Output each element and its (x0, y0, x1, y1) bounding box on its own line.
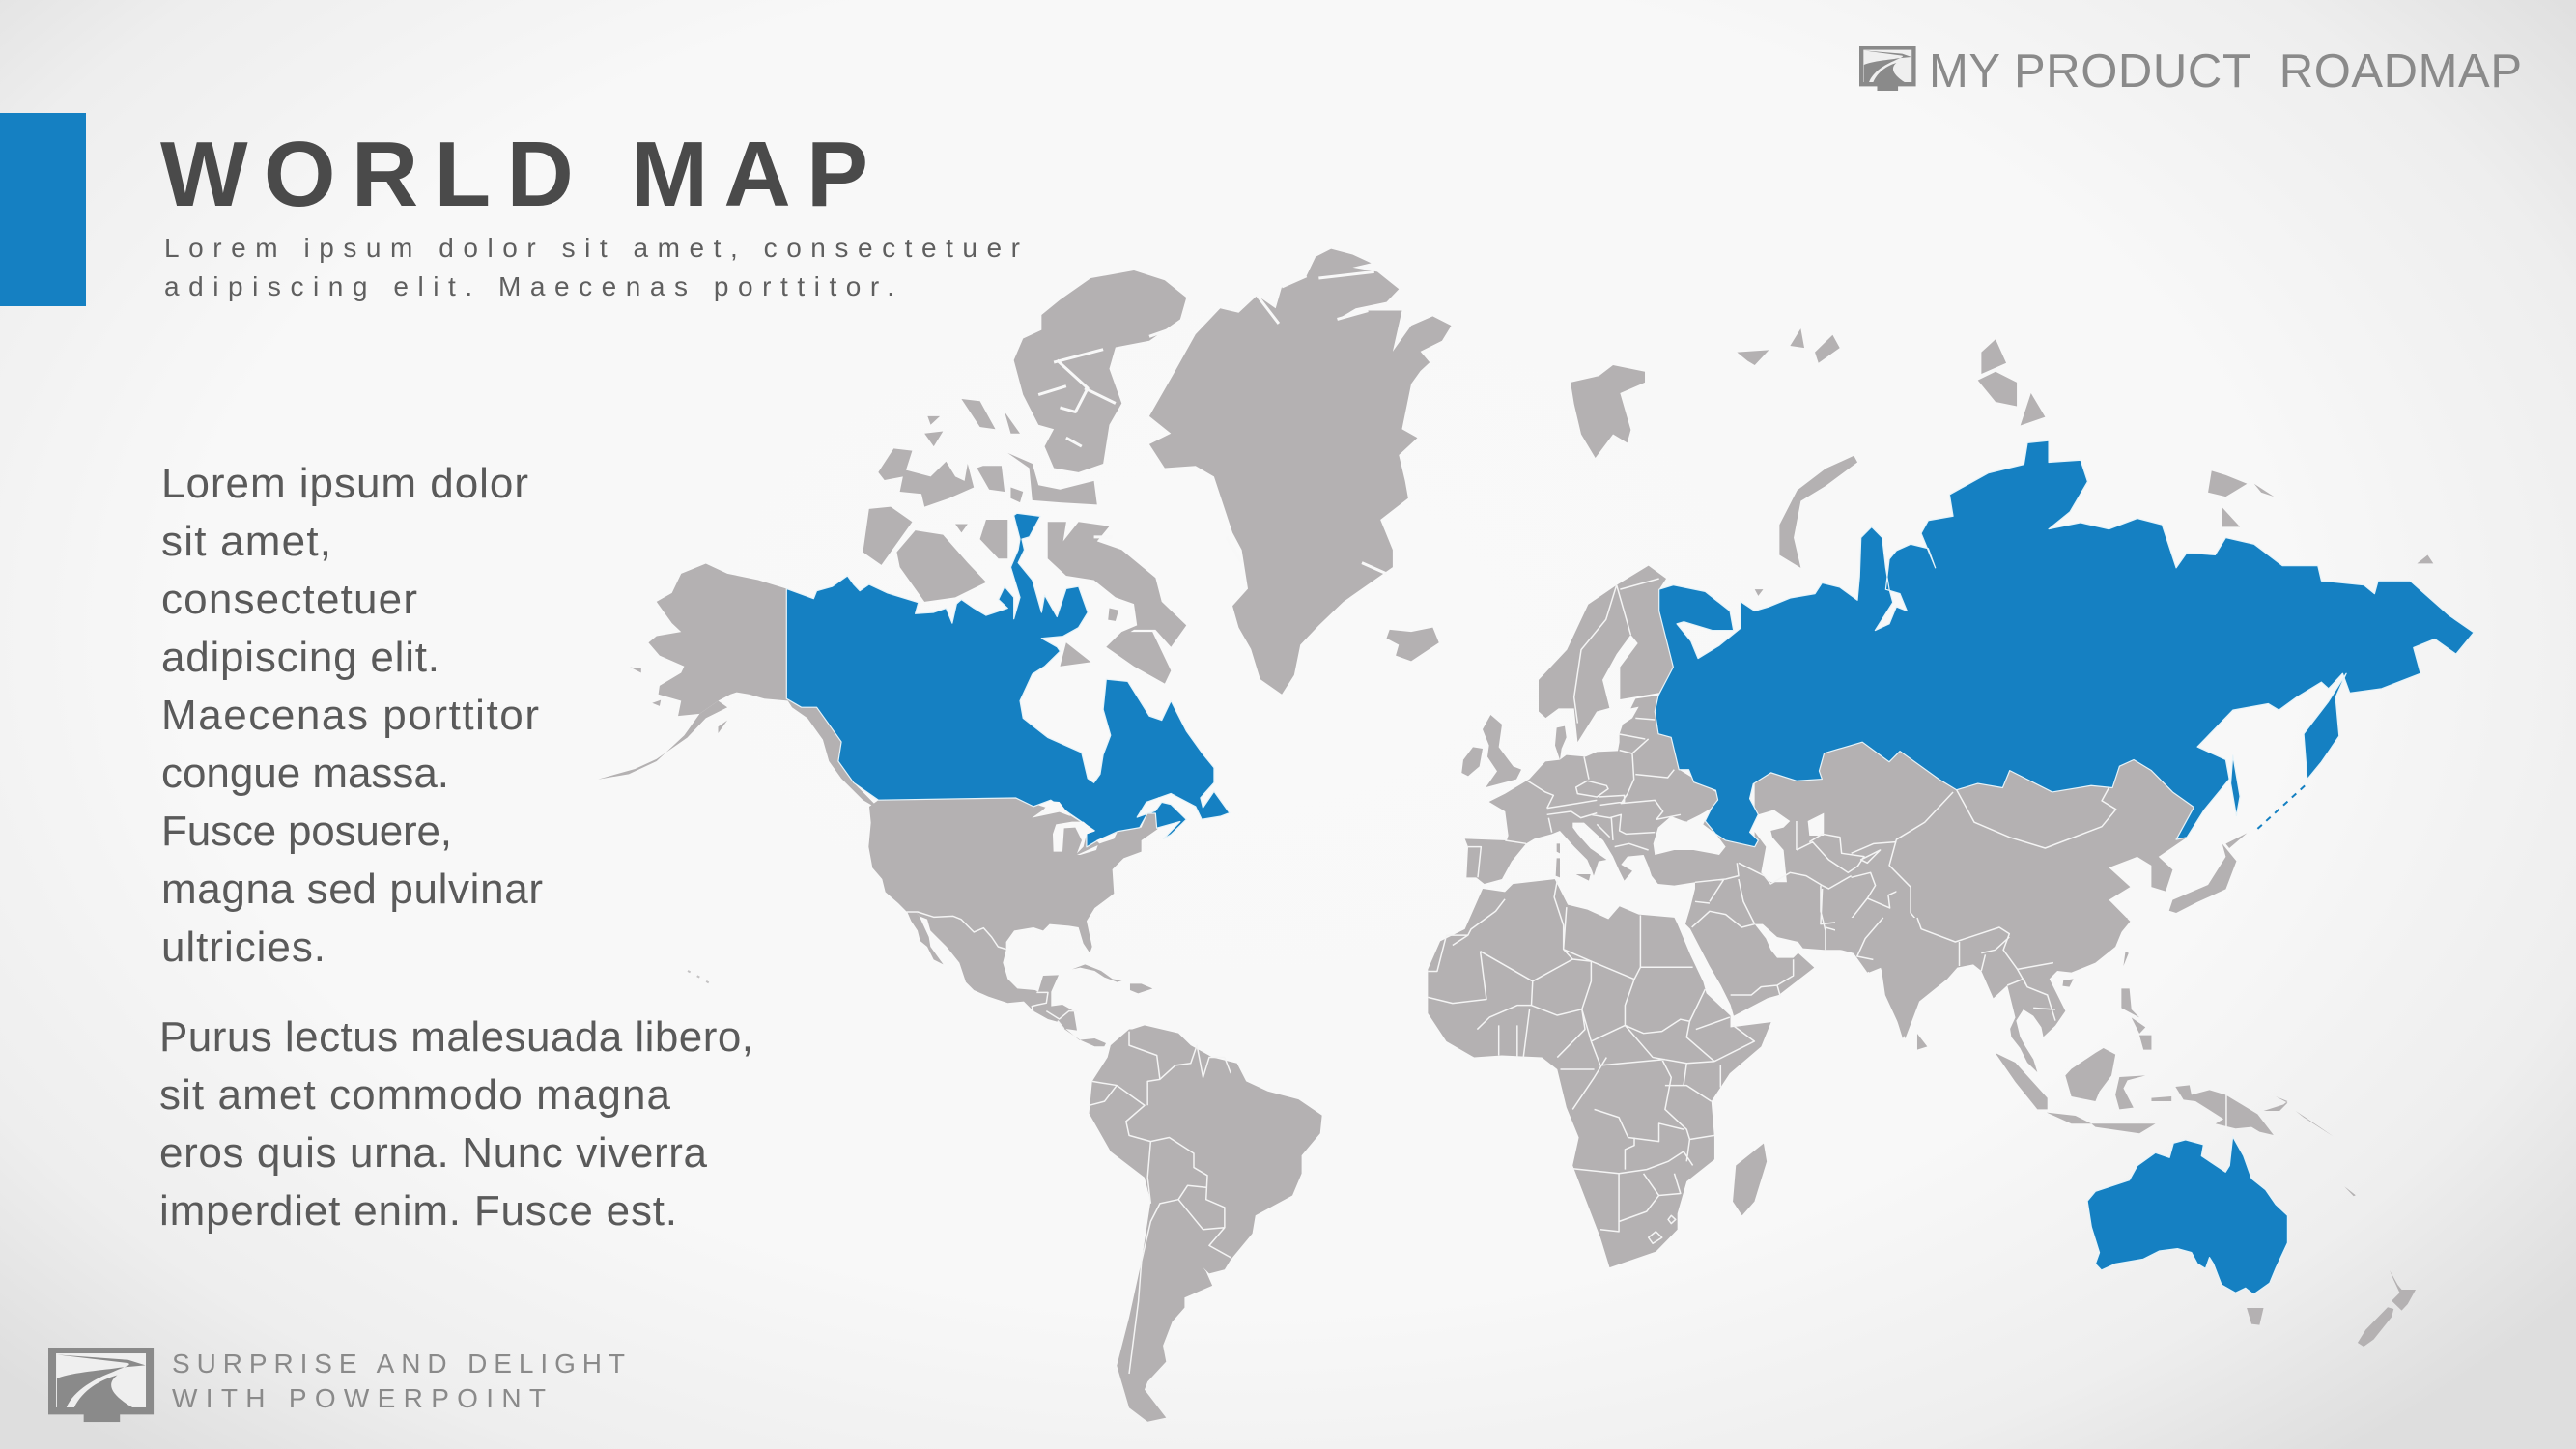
Europe and West Asia landmass (1465, 696, 1932, 1038)
world map (598, 249, 2474, 1422)
Lakes Erie and Ontario (1077, 833, 1118, 855)
body text: first paragraph: congue massa. (161, 750, 449, 797)
Cuba (1072, 964, 1122, 982)
South and South-East Asia and Oceania region (1835, 918, 2416, 1347)
footer logo and tagline (48, 1348, 625, 1422)
body text: second paragraph (159, 1013, 753, 1235)
Caspian Sea (1751, 810, 1790, 882)
Philippines (2121, 988, 2151, 1050)
title: WORLD MAP (160, 123, 868, 226)
Alaska small islands (630, 668, 727, 733)
body text: second paragraph: eros quis urna. Nunc viverra (159, 1129, 708, 1177)
Sakhalin (2231, 755, 2240, 816)
Canada (786, 513, 1230, 847)
St Lawrence estuary (1137, 797, 1159, 816)
Japan (2169, 833, 2247, 913)
Africa borders (1428, 880, 1754, 1232)
body text: first paragraph: ultricies. (161, 923, 326, 971)
subtitle: adipiscing elit. Maecenas porttitor. (164, 271, 894, 301)
icon: road monitor (48, 1348, 154, 1422)
subtitle (164, 233, 1020, 301)
Mediterranean islands (1556, 843, 1591, 881)
blue accent block (0, 113, 86, 306)
South America borders (1090, 1032, 1231, 1374)
India, China south, Indochina (1835, 918, 2128, 1072)
Lesotho and Eswatini outlines (1649, 1215, 1676, 1243)
North America north region: Alaska, Arctic islands, Greenland, Canada (598, 249, 1451, 847)
Alaska panhandle (786, 698, 882, 810)
icon: road monitor small (1859, 46, 1916, 91)
Africa (1428, 879, 1771, 1267)
Kamchatka (2304, 673, 2346, 780)
Arctic archipelago islands (863, 270, 1186, 684)
subtitle: Lorem ipsum dolor sit amet, consectetuer (164, 233, 1020, 263)
body text: second paragraph: imperdiet enim. Fusce est. (159, 1187, 677, 1235)
Scandinavia (1539, 566, 1673, 742)
Greenland (1149, 249, 1451, 695)
Hispaniola (1130, 983, 1152, 993)
Papua New Guinea (2175, 1085, 2274, 1135)
Russia (1655, 440, 2474, 847)
body text: first paragraph: adipiscing elit. (161, 634, 439, 681)
Europe and West Asia borders (1468, 718, 1932, 997)
Hawaii dots (688, 971, 713, 985)
Sri Lanka (1917, 1034, 1927, 1050)
Australia (2087, 1137, 2287, 1294)
body text: first paragraph: consectetuer (161, 576, 417, 623)
body text: first paragraph (161, 460, 543, 971)
US, Mexico and Central America borders (907, 912, 1077, 1029)
South America and Africa region (1090, 879, 1771, 1422)
New Guinea border (2225, 1094, 2227, 1128)
header text: MY PRODUCT ROADMAP (1929, 45, 2522, 98)
South America (1090, 1025, 1322, 1422)
body text: second paragraph: Purus lectus malesuada libero, (159, 1013, 753, 1061)
Arctic Eurasian islands (1571, 328, 2433, 596)
Great Lakes and St Lawrence (1032, 797, 1159, 855)
New Caledonia (2344, 1186, 2356, 1196)
Indonesia and Malaysia islands (1996, 1048, 2171, 1133)
body text: first paragraph: Fusce posuere, (161, 808, 452, 855)
Alaska Peninsula and Aleutians (598, 701, 727, 780)
Great Britain (1483, 715, 1521, 787)
footer tagline: WITH POWERPOINT (172, 1383, 546, 1413)
Asia borders (1857, 918, 2055, 1021)
footer tagline: SURPRISE AND DELIGHT (172, 1349, 625, 1378)
Arctic channels (1038, 324, 1186, 537)
US and Mexico landmass (868, 799, 1157, 1046)
Iceland (1387, 628, 1439, 661)
Greenland fjords (1227, 271, 1387, 574)
Baja California (907, 912, 944, 964)
body text: second paragraph: sit amet commodo magna (159, 1071, 671, 1119)
Lake Superior (1032, 801, 1070, 818)
header logo and product name (1859, 45, 2522, 98)
Madagascar (1733, 1144, 1767, 1215)
Aral Sea (1808, 813, 1824, 836)
Europe, Middle East and Central Asia region (1461, 696, 1932, 1038)
body text: first paragraph: sit amet, (161, 518, 331, 565)
footer tagline (172, 1349, 625, 1413)
Sea of Azov (1687, 809, 1712, 826)
body text: first paragraph: magna sed pulvinar (161, 866, 543, 913)
East Asia mainland (1896, 740, 2194, 948)
Northern and Eastern Eurasia region (1539, 328, 2474, 948)
Lakes Michigan and Huron (1053, 822, 1094, 853)
Kuril Islands (2257, 783, 2307, 829)
USA, Mexico and Central America (868, 799, 1157, 1046)
body text: first paragraph: Lorem ipsum dolor (161, 460, 528, 507)
New Britain and Solomon Islands (2264, 1096, 2334, 1137)
Black Sea (1654, 816, 1726, 855)
Alaska (648, 564, 789, 716)
Scandinavian borders (1574, 579, 1659, 724)
New Zealand (2358, 1270, 2416, 1347)
body text: first paragraph: Maecenas porttitor (161, 692, 539, 739)
East Asia borders (1889, 788, 2116, 943)
Tasmania (2247, 1308, 2264, 1325)
Taiwan and Hainan (2062, 952, 2129, 987)
Ireland (1461, 747, 1483, 776)
